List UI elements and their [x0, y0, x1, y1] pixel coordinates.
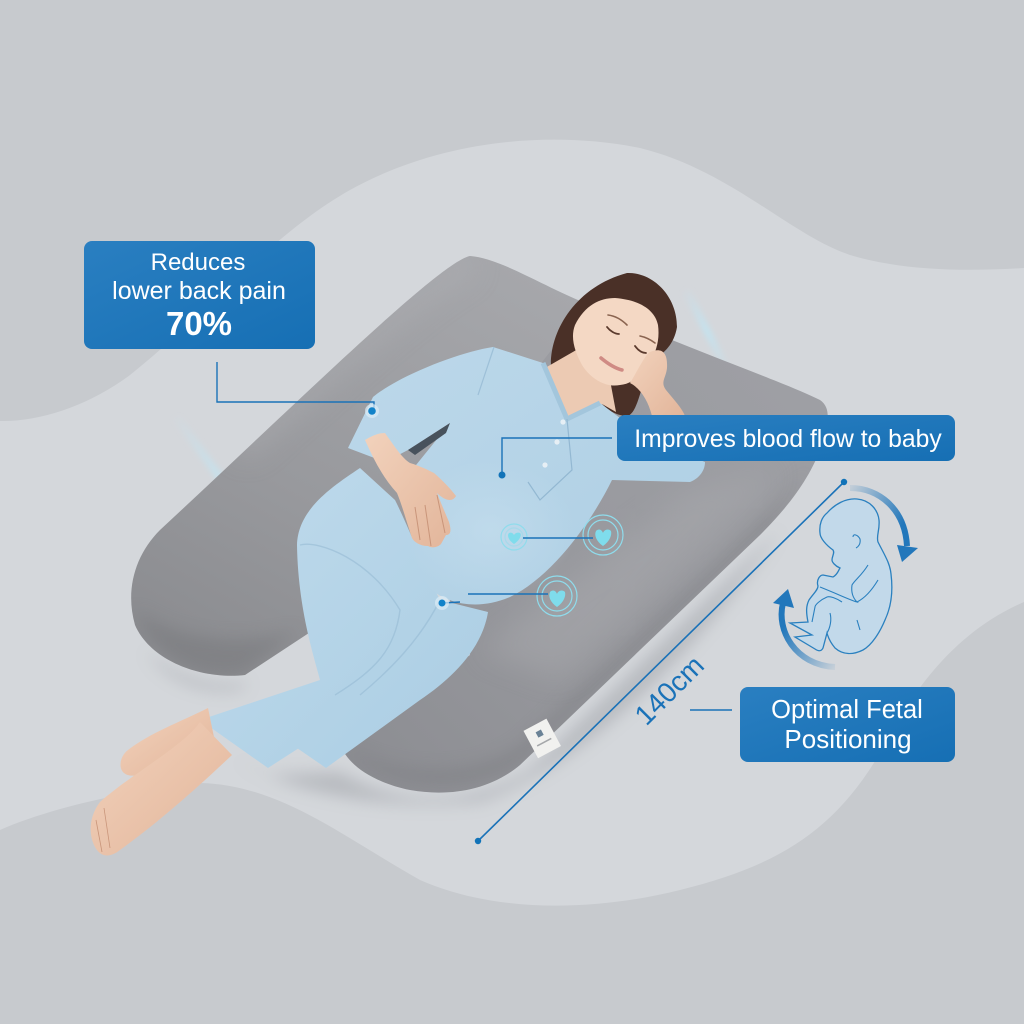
leader: back pain to sleeve	[217, 362, 379, 418]
pillow fabric tag	[523, 719, 561, 758]
callout: reduces lower back pain	[84, 241, 315, 349]
arrow: rotation bottom	[773, 589, 835, 667]
face	[573, 298, 659, 386]
connector to fetal positioning	[690, 709, 732, 711]
hair	[551, 273, 677, 416]
dimension line: 140cm	[475, 479, 847, 844]
leader: blood flow to belly	[498, 438, 612, 478]
callout: optimal fetal positioning: Positioning	[784, 724, 912, 754]
trouser legs	[200, 468, 488, 768]
marker: heart right	[583, 515, 623, 555]
arrow: rotation clockwise top	[850, 488, 918, 562]
callout: optimal fetal positioning	[740, 687, 955, 762]
supporting hand and forearm	[630, 350, 685, 416]
callout: reduces lower back pain: 70%	[166, 305, 232, 342]
hand on belly	[365, 433, 456, 547]
marker: small heart	[501, 524, 527, 550]
U-shaped grey pillow	[131, 256, 828, 793]
connector lines	[442, 538, 593, 603]
callout: improves blood flow: Improves blood flow to baby	[634, 426, 942, 453]
feet	[91, 708, 232, 855]
marker: heart lower	[537, 576, 577, 616]
callout: reduces lower back pain: lower back pain	[112, 277, 286, 305]
dimension line: 140cm: 140cm	[629, 650, 710, 731]
streak: right light accent	[682, 290, 732, 374]
neck	[545, 345, 616, 420]
closed eyes and lips	[601, 315, 655, 370]
callout: improves blood flow	[617, 415, 955, 461]
callout: reduces lower back pain: Reduces	[151, 249, 245, 276]
streak: left light accent	[172, 416, 285, 564]
hip dot	[435, 596, 449, 610]
pillow right arm	[340, 300, 828, 793]
pregnant woman	[91, 273, 705, 855]
belly and hip data markers	[435, 515, 623, 616]
pillow and leg shadow	[145, 530, 780, 804]
pillow left arm	[131, 256, 590, 676]
callout: optimal fetal positioning: Optimal Fetal	[771, 696, 923, 724]
pyjama shirt and belly	[348, 347, 705, 604]
icon: fetus in womb	[790, 499, 892, 654]
